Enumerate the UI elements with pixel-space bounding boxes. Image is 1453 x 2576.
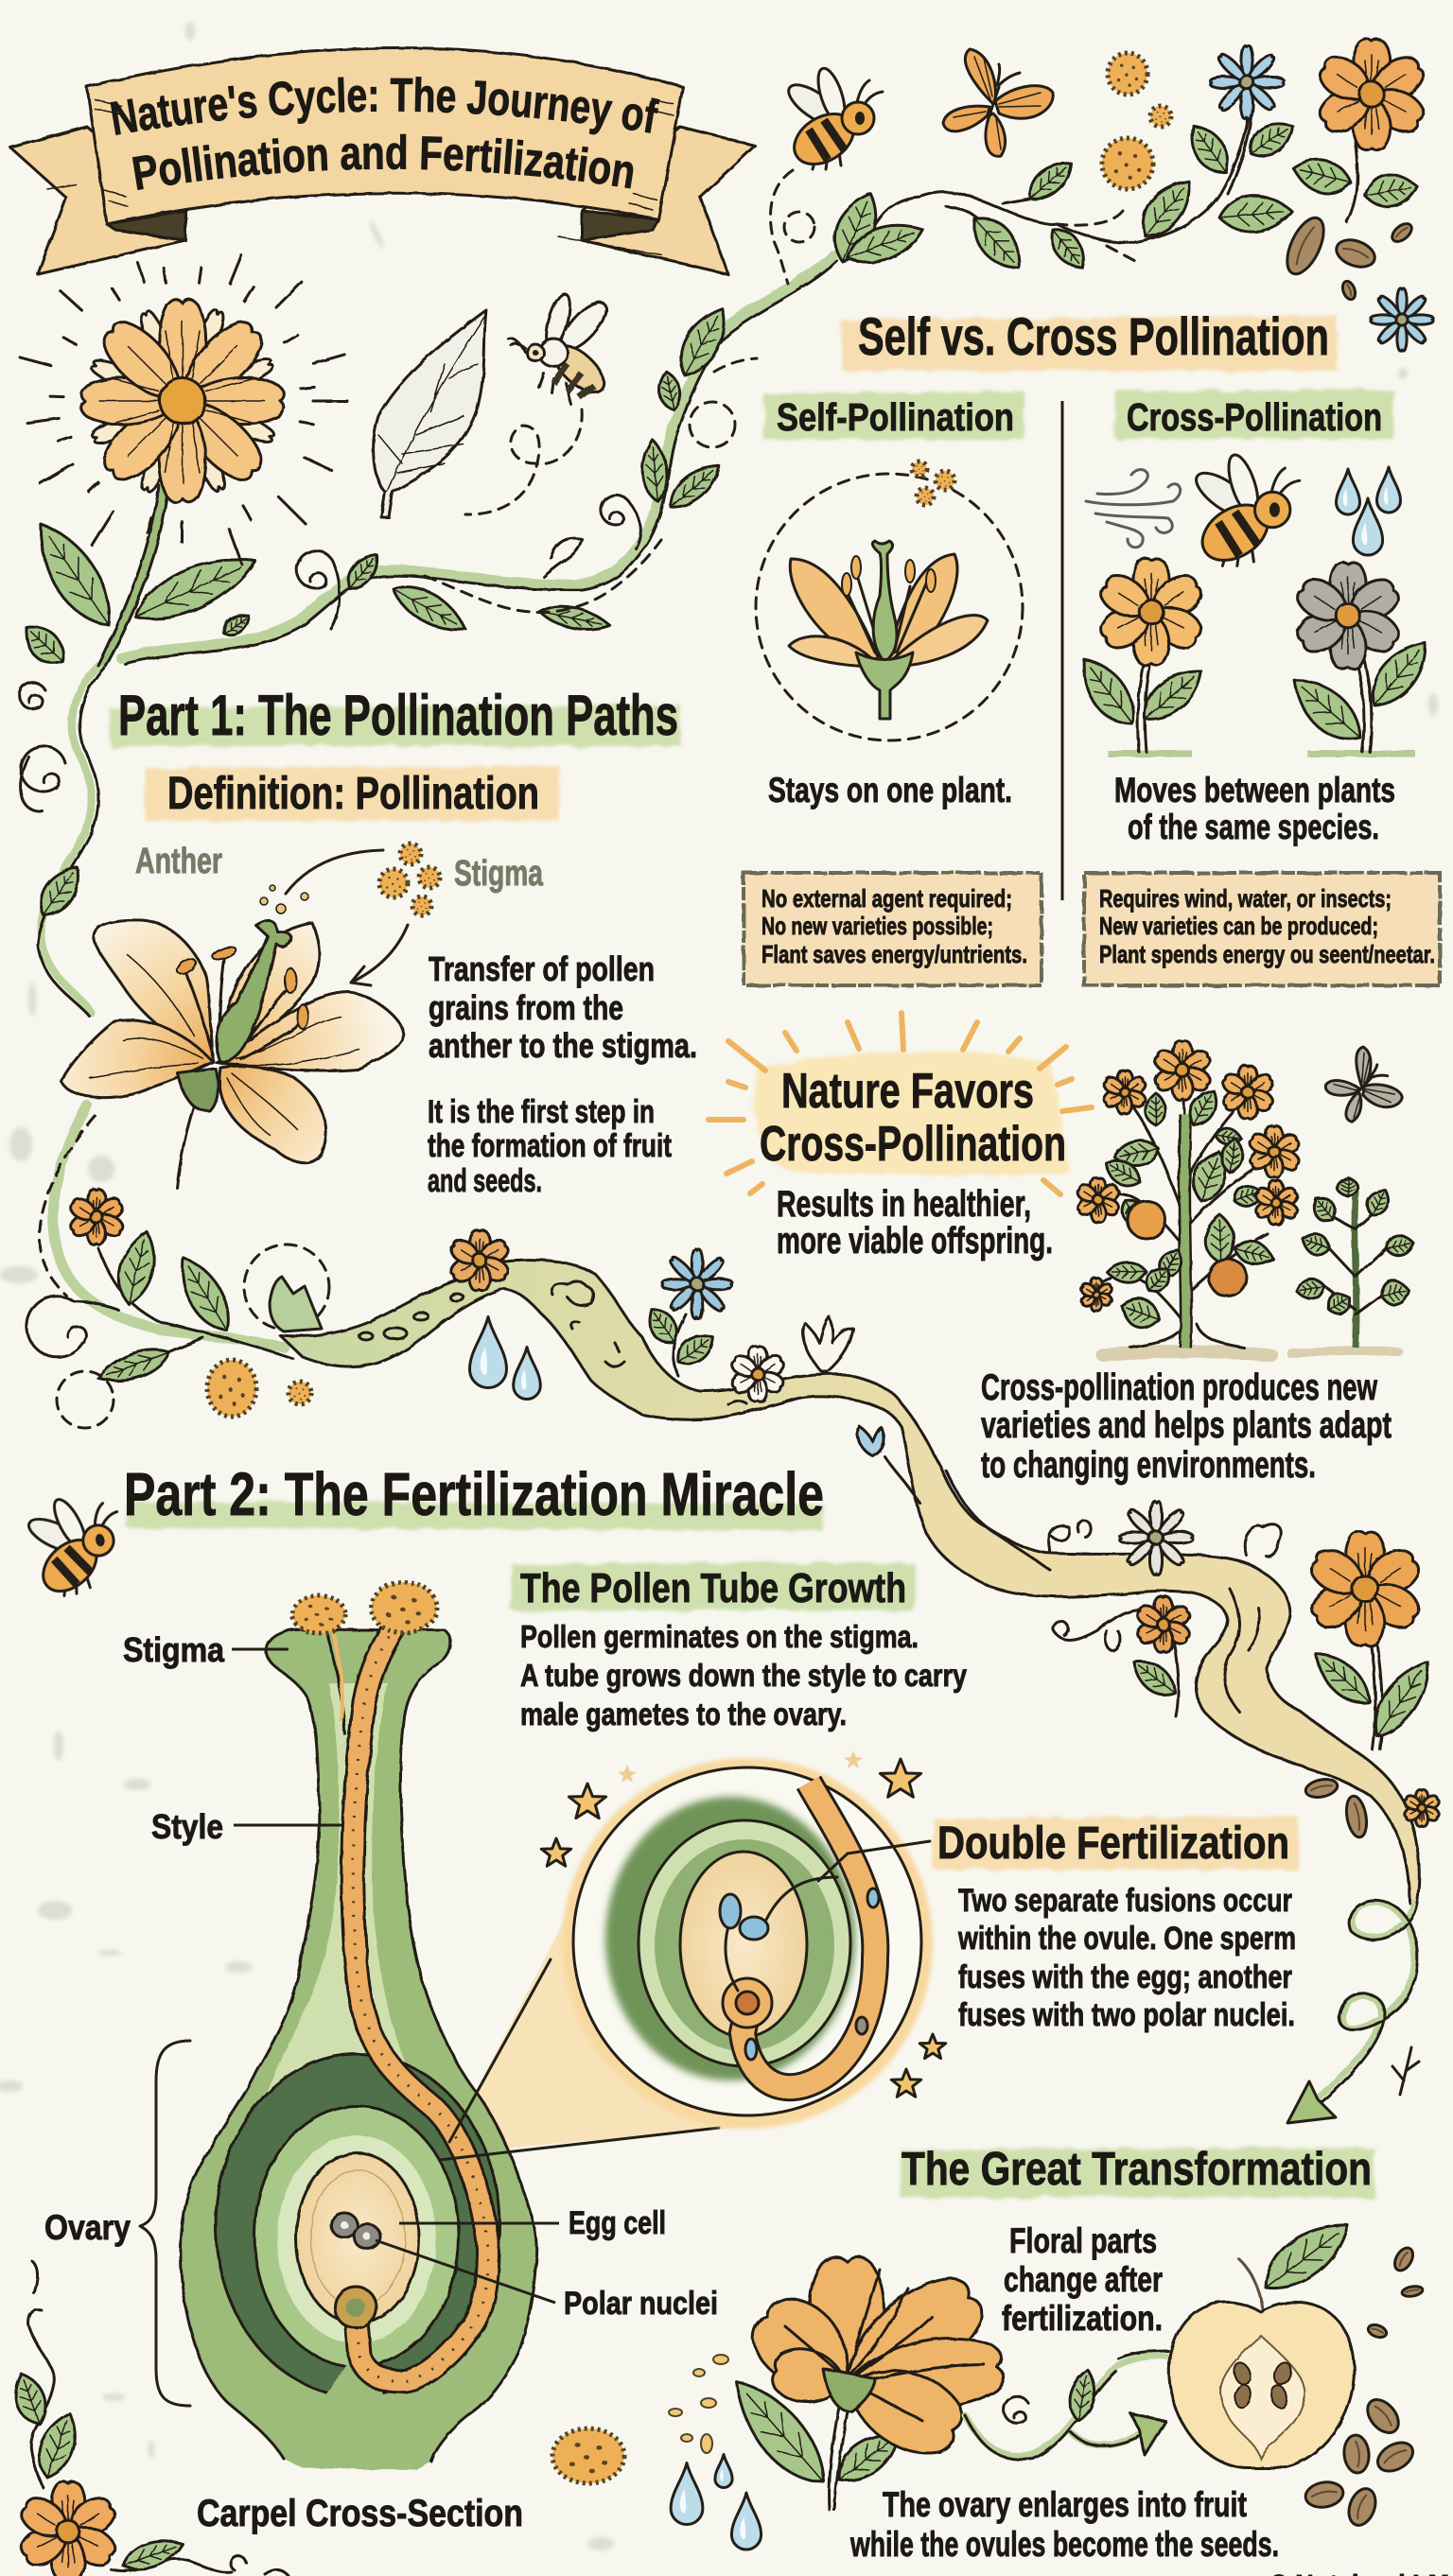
floral parts text [1002, 2221, 1163, 2338]
orange butterfly [943, 49, 1053, 156]
cross-pollination bee [1190, 451, 1300, 571]
title text [110, 77, 660, 191]
note box: self: No external agent required; [762, 884, 1012, 913]
text: healthier offspring: more viable offspring. [777, 1221, 1053, 1262]
callout: Nature Favors Cross-Pollination: Nature Favors [781, 1064, 1034, 1119]
double fertilization paragraph [957, 1883, 1296, 2033]
pollen and water drops by river [207, 1316, 540, 1417]
double fertilization paragraph: fuses with two polar nuclei. [958, 1997, 1295, 2033]
bottom-left corner ornament [8, 2261, 289, 2576]
note box: self: Flant saves energy/untrients. [762, 940, 1027, 968]
water drops [1337, 467, 1400, 555]
subheading: Self-Pollination: Self-Pollination [777, 395, 1014, 439]
magnified ovule detail [562, 1758, 933, 2129]
definition paragraph: anther to the stigma. [429, 1026, 697, 1065]
vine: upper flowing stem [121, 104, 1251, 664]
transformation caption: The ovary enlarges into fruit [883, 2485, 1247, 2524]
caption: self: Stays on one plant. [768, 771, 1012, 809]
definition paragraph [428, 949, 697, 1199]
wind icon [1086, 470, 1181, 548]
arrow to transformation [1287, 2081, 1336, 2123]
transformation caption: while the ovules become the seeds. [849, 2525, 1279, 2564]
transformation flower [719, 2256, 1007, 2510]
callout: Nature Favors Cross-Pollination [709, 1013, 1092, 1194]
floating seeds near river end [1304, 1777, 1441, 1838]
floral parts text: change after [1004, 2260, 1163, 2299]
sketched bee [508, 291, 613, 405]
dashed bits near the river start [57, 1244, 329, 1428]
seeds around apple [1304, 2245, 1424, 2529]
heading: Part 1: Part 1: The Pollination Paths [118, 684, 678, 747]
carpel labels: Egg cell [569, 2205, 666, 2241]
radiant sunflower [16, 255, 347, 672]
double fertilization paragraph: fuses with the egg; another [958, 1959, 1292, 1995]
label: Stigma: Stigma [454, 854, 544, 894]
stars around magnifier [541, 1750, 946, 2097]
title banner [10, 48, 755, 274]
dashed flight paths at top [425, 170, 1135, 613]
title text: Pollination and Fertilization [132, 134, 634, 191]
definition paragraph: grains from the [429, 988, 623, 1027]
sketched leaf [374, 310, 486, 517]
grey butterfly [1316, 1039, 1415, 1137]
text: new varieties: to changing environments. [981, 1445, 1316, 1486]
pollen tube paragraph: A tube grows down the style to carry [520, 1658, 968, 1693]
transformation vine arrow [965, 2351, 1168, 2460]
flying bee left [19, 1487, 131, 1606]
double fertilization paragraph: Two separate fusions occur [958, 1883, 1292, 1919]
top-right bee [782, 65, 883, 175]
definition paragraph: It is the first step in [428, 1094, 655, 1130]
carpel labels: Stigma [123, 1630, 225, 1669]
orange flower plant [1070, 558, 1211, 754]
flowers along the river [68, 1190, 1441, 1749]
subheading: Double Fertilization: Double Fertilization [937, 1819, 1289, 1869]
vine: left edge stem and spirals [20, 666, 293, 1390]
note box: self: No new varieties possible; [762, 912, 993, 940]
carpel labels: Polar nuclei [564, 2286, 718, 2322]
subheading: Definition: Definition: Pollination [167, 769, 539, 819]
small young tree [1291, 1177, 1415, 1354]
carpel labels: Ovary [44, 2208, 131, 2247]
note box: self [744, 873, 1042, 985]
orange flower top right [1289, 39, 1429, 222]
small twig [1392, 2047, 1419, 2095]
label: Anther: Anther [135, 842, 222, 881]
pollen tube paragraph: male gametes to the ovary. [520, 1697, 847, 1732]
magnification cone [473, 1904, 757, 2149]
cone outlines [440, 1877, 719, 2160]
pollen grain, yellow dots and drops [552, 2355, 762, 2550]
subheading: Pollen Tube Growth: The Pollen Tube Growth [520, 1565, 906, 1611]
river of growth [280, 1260, 1419, 2116]
apple cross-section [1169, 2208, 1359, 2468]
carpel labels [44, 1630, 718, 2534]
floral parts text: Floral parts [1009, 2221, 1157, 2260]
text: new varieties [981, 1367, 1392, 1486]
definition paragraph: and seeds. [428, 1163, 542, 1199]
seeds top right [1280, 213, 1415, 301]
text: healthier offspring: Results in healthier, [777, 1184, 1031, 1225]
small blue flower [1371, 288, 1433, 351]
transformation caption [849, 2485, 1279, 2564]
double fertilization paragraph: within the ovule. One sperm [957, 1921, 1296, 1957]
note box: cross [1084, 873, 1440, 985]
carpel labels: Style [151, 1807, 223, 1846]
subheading: The Great Transformation: The Great Transformation [902, 2144, 1372, 2195]
text: healthier offspring [777, 1184, 1053, 1262]
grey flower plant [1282, 562, 1438, 754]
definition paragraph: Transfer of pollen [429, 949, 655, 988]
pollination arrows and grains [260, 844, 440, 985]
floral parts text: fertilization. [1002, 2299, 1163, 2338]
carpel labels: Carpel Cross-Section [197, 2493, 523, 2534]
self-pollination flower in dashed circle [756, 461, 1023, 740]
callout: Nature Favors Cross-Pollination: Cross-Pollination [760, 1117, 1066, 1172]
subheading: Double Fertilization [818, 1817, 1298, 1881]
definition paragraph: the formation of fruit [428, 1128, 672, 1164]
large fruiting tree [1076, 1041, 1301, 1355]
title text: Nature's Cycle: The Journey of [110, 77, 660, 135]
blue flower with stem [1132, 45, 1300, 246]
pollen tube paragraph: Pollen germinates on the stigma. [520, 1619, 919, 1654]
caption: cross [1114, 771, 1395, 846]
pollen grains top [1102, 53, 1171, 189]
heading: Part 2: Part 2: The Fertilization Miracle [124, 1460, 824, 1528]
pollen tube paragraph [520, 1619, 968, 1732]
carpel cross-section diagram [181, 1582, 536, 2470]
large lily flower [61, 920, 404, 1188]
subheading: Cross-Pollination: Cross-Pollination [1127, 395, 1382, 439]
